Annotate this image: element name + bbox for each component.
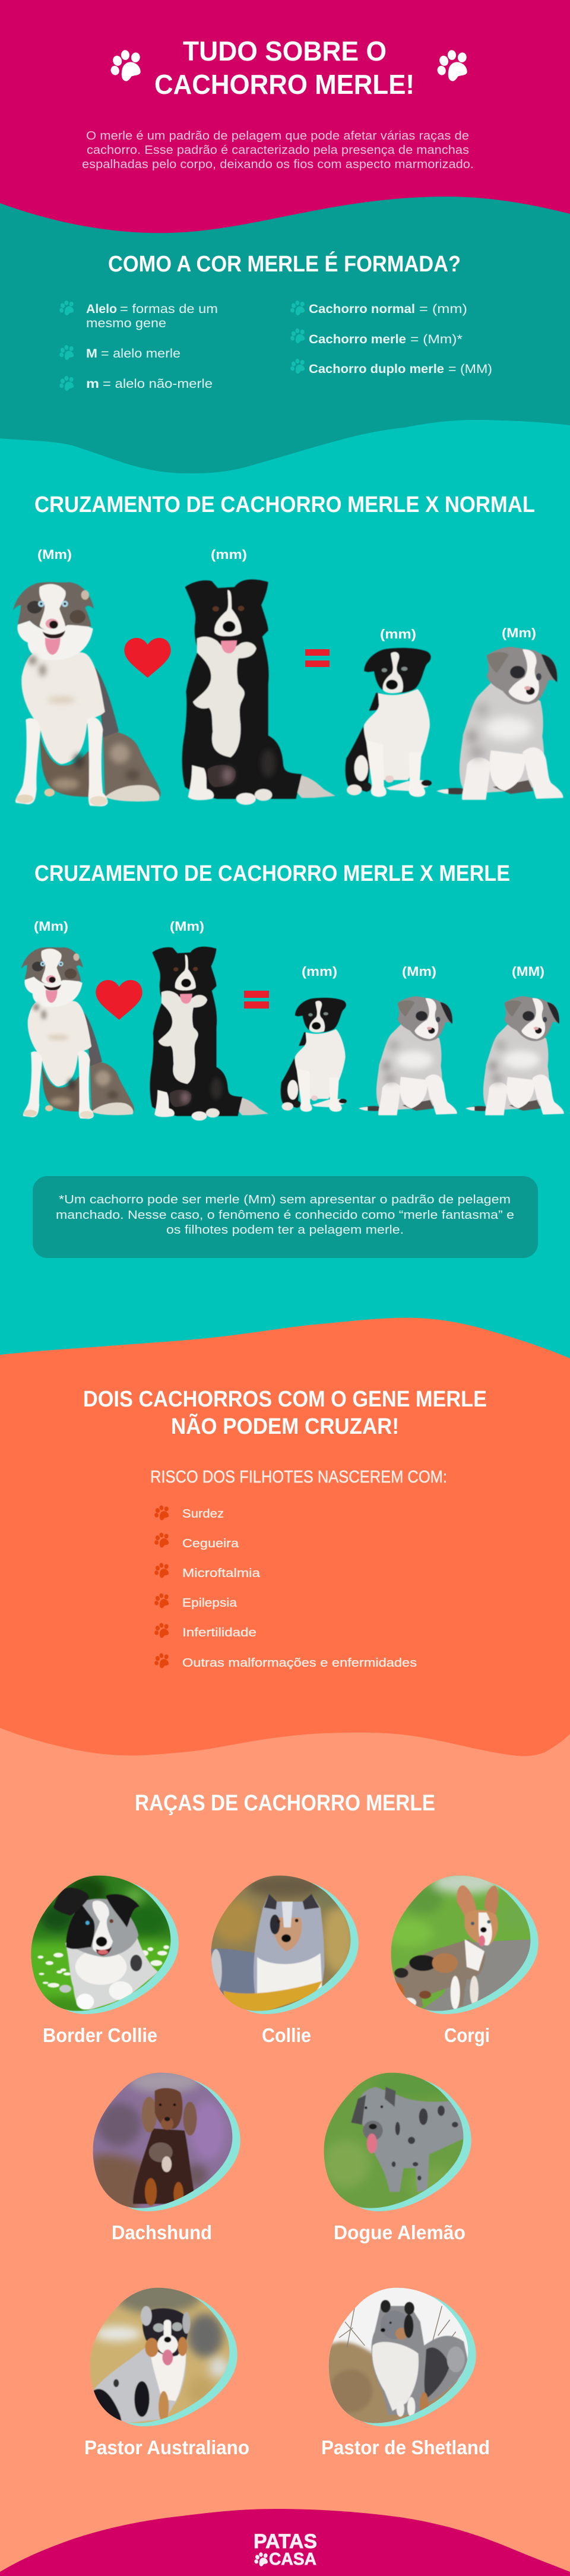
title [154, 36, 414, 100]
list: alelos: = alelo merle [101, 347, 180, 361]
heading: COMO A COR MERLE É FORMADA? [108, 251, 461, 277]
label: Collie [262, 2024, 311, 2046]
icon: bullet paw [290, 301, 305, 315]
callout: merle fantasma: os filhotes podem ter a pelagem merle. [166, 1224, 404, 1237]
dog: merle puppy [359, 996, 457, 1115]
icon: right paw [436, 50, 467, 81]
title: TUDO SOBRE O [183, 36, 387, 67]
callout: merle fantasma [33, 1176, 538, 1258]
icon: left paw [109, 50, 141, 81]
photo: dachshund [93, 2073, 240, 2211]
labels: genótipos linha 2: (Mm) [170, 919, 204, 934]
heading: RAÇAS DE CACHORRO MERLE [135, 1791, 435, 1816]
callout: merle fantasma: *Um cachorro pode ser merle (Mm) sem apresentar o padrão de pelagem [59, 1193, 511, 1206]
list: genótipos: = (mm) [419, 302, 467, 316]
heading: DOIS CACHORROS COM O GENE MERLE [83, 1387, 487, 1412]
icon: bullet paw [59, 301, 74, 315]
label: Pastor Australiano [84, 2436, 249, 2458]
labels: genótipos linha 2: (MM) [512, 964, 544, 979]
dog: merle adult [13, 582, 161, 807]
dog: merle puppy [466, 996, 564, 1115]
list: genótipos: Cachorro duplo merle [309, 362, 444, 376]
heading: merle x normal: CRUZAMENTO DE CACHORRO MERLE X NORMAL [34, 492, 535, 517]
icon: heart [124, 638, 171, 678]
photo: border collie [31, 1876, 179, 2014]
labels: genótipos linha 2: (Mm) [34, 919, 68, 934]
labels: genótipos linha 1 [37, 547, 536, 641]
panel: raças de cachorro merle [0, 1728, 570, 2454]
photo: collie [211, 1876, 359, 2014]
intro text: espalhadas pelo corpo, deixando os fios com aspecto marmorizado. [82, 158, 474, 171]
intro text [82, 129, 474, 171]
title: CACHORRO MERLE! [154, 69, 414, 100]
list: alelos: = alelo não-merle [103, 377, 213, 391]
dog: merle adult [21, 947, 134, 1119]
labels: genótipos linha 1: (mm) [380, 627, 416, 641]
list: genótipos [290, 301, 492, 376]
list: riscos: Surdez [182, 1507, 224, 1521]
list: alelos: m [86, 377, 99, 391]
photo: corgi [391, 1876, 539, 2014]
heading: NÃO PODEM CRUZAR! [171, 1413, 399, 1439]
photo: pastor australiano [90, 2288, 238, 2426]
list: alelos: Alelo [86, 302, 117, 316]
labels: genótipos linha 1: (Mm) [502, 625, 536, 640]
icon: heart [96, 980, 142, 1020]
label: Dogue Alemão [334, 2221, 466, 2243]
panel: hero [0, 0, 570, 238]
label: Border Collie [43, 2024, 157, 2046]
panel: cruzamentos [0, 420, 570, 1366]
panel: dois cachorros com o gene merle [0, 1318, 570, 1761]
list: riscos: Microftalmia [182, 1567, 261, 1580]
list: riscos [154, 1505, 417, 1670]
subheading: RISCO DOS FILHOTES NASCEREM COM: [150, 1468, 447, 1487]
list: genótipos: Cachorro merle [309, 333, 406, 346]
list: genótipos: = (MM) [448, 362, 492, 376]
labels: genótipos linha 2: (Mm) [402, 964, 436, 979]
logo: patas da casa: CASA [269, 2550, 316, 2569]
list: riscos: Infertilidade [182, 1626, 256, 1639]
dog: black and white puppy [346, 648, 432, 797]
photo: dogue alemão [324, 2073, 471, 2211]
heading [83, 1387, 487, 1439]
labels: genótipos linha 2: (mm) [302, 964, 337, 979]
list: genótipos: Cachorro normal [309, 302, 415, 316]
list: alelos: = formas de um [120, 302, 218, 316]
logo: patas da casa [254, 2530, 317, 2569]
dog: black and white puppy [281, 998, 347, 1112]
logo: patas da casa: PATAS [254, 2530, 317, 2553]
labels: genótipos linha 2 [34, 919, 544, 979]
icon: bullet paw [154, 1505, 169, 1521]
list: alelos: mesmo gene [86, 317, 166, 330]
list: riscos: Cegueira [182, 1537, 239, 1550]
list: genótipos: = (Mm)* [410, 333, 463, 346]
callout: merle fantasma: manchado. Nesse caso, o fenômeno é conhecido como “merle fantasma” e [56, 1209, 514, 1222]
icon: equals sign [305, 649, 330, 667]
dog: black and white adult [150, 947, 268, 1121]
dog: black and white adult [182, 579, 335, 805]
list: alelos: M [86, 347, 97, 361]
intro text: O merle é um padrão de pelagem que pode afetar várias raças de [86, 129, 469, 143]
panel: como a cor merle é formada [0, 197, 570, 481]
label: Pastor de Shetland [321, 2436, 490, 2458]
list: riscos: Epilepsia [182, 1597, 238, 1610]
label: Corgi [444, 2024, 490, 2046]
heading: merle x merle: CRUZAMENTO DE CACHORRO MERLE X MERLE [34, 861, 510, 886]
labels: genótipos linha 1: (mm) [211, 547, 247, 562]
list: alelos [59, 301, 218, 391]
photo: pastor de shetland [329, 2288, 476, 2426]
dog: merle puppy [436, 647, 563, 800]
list: riscos: Outras malformações e enfermidades [182, 1657, 417, 1670]
intro text: cachorro. Esse padrão é caracterizado pela presença de manchas [87, 144, 469, 157]
label: Dachshund [112, 2221, 212, 2243]
labels: genótipos linha 1: (Mm) [37, 547, 72, 562]
panel: footer [0, 2509, 570, 2576]
icon: equals sign [244, 991, 269, 1009]
